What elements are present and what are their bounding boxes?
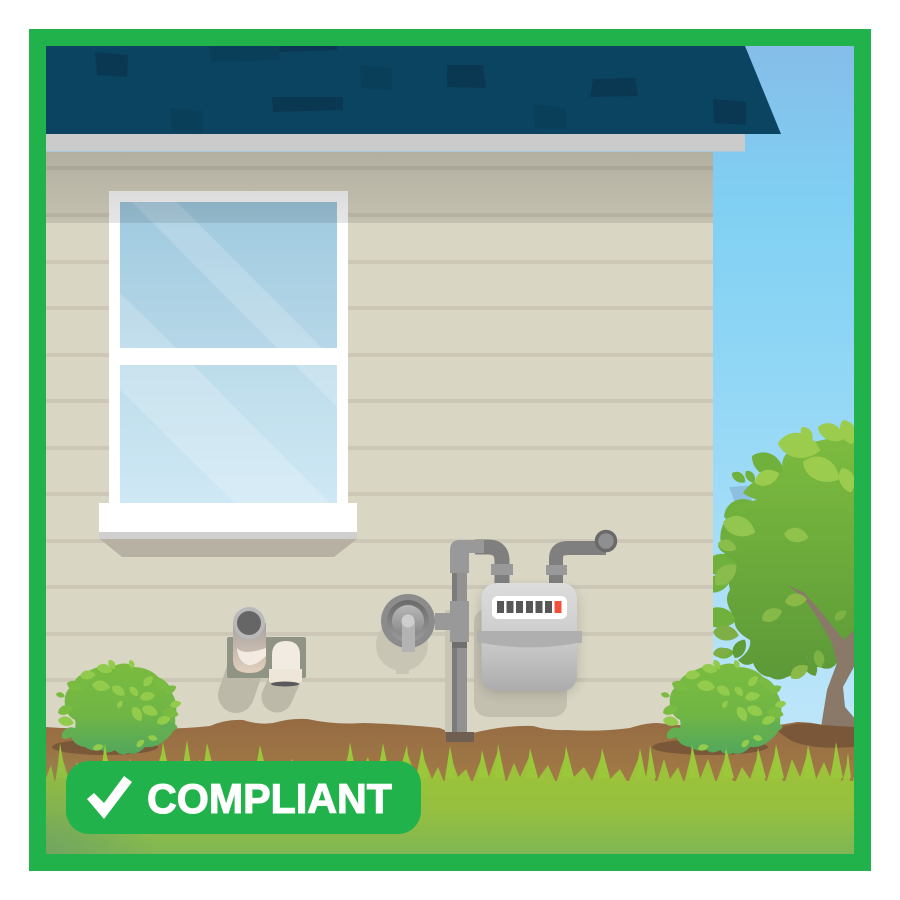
window sill [99, 503, 357, 532]
upper tee fitting [450, 540, 484, 573]
exhaust vents [227, 607, 306, 697]
pipe outlet knob [596, 532, 616, 550]
red meter digit [554, 601, 562, 613]
tree shadow patches [722, 486, 752, 526]
eave shadow [46, 152, 713, 223]
roof shingles [95, 46, 746, 125]
gas meter [477, 583, 582, 693]
lower window pane [120, 365, 337, 503]
riser base plate [446, 732, 474, 742]
badge corner shade [46, 744, 156, 854]
right bush ground shadow [652, 739, 768, 755]
regulator lever [402, 621, 415, 652]
right bush [660, 658, 787, 754]
grass lower fill [46, 781, 854, 854]
checkmark icon [87, 776, 132, 819]
outer dark leaves [713, 452, 818, 676]
outlet elbow [556, 548, 606, 585]
tree trunk [787, 585, 856, 730]
upper window pane [120, 202, 337, 348]
fascia board [46, 134, 745, 152]
regulator tee [435, 601, 469, 642]
vent mounting plate [227, 637, 306, 678]
sky [46, 46, 854, 725]
tree ground shadow [775, 723, 854, 748]
siding lines [46, 166, 713, 682]
thin tall grass blades [57, 740, 851, 778]
tree [713, 420, 854, 727]
meter band [477, 631, 582, 648]
faint roof shingles [278, 52, 279, 53]
window [99, 191, 357, 557]
sill underside [99, 532, 357, 539]
soil [46, 718, 854, 781]
inlet elbow [475, 547, 502, 585]
sill shadow [100, 539, 357, 557]
vent shadows [236, 655, 288, 697]
roof [46, 46, 781, 134]
pipe and regulator shadows [376, 610, 455, 732]
main riser [457, 573, 467, 732]
gas regulator [381, 594, 435, 652]
badge label: COMPLIANT [147, 775, 392, 822]
tree crown [713, 420, 854, 727]
gas piping [435, 532, 616, 742]
round vent pipe [233, 607, 266, 673]
light tree leaves [710, 417, 860, 682]
meter display [492, 596, 567, 619]
window frame [109, 191, 348, 506]
meter body [482, 583, 577, 691]
left bush [55, 658, 182, 754]
gas meter shadow [474, 608, 567, 717]
compliant badge [66, 761, 421, 834]
meter collars [491, 564, 513, 575]
left bush ground shadow [52, 739, 158, 755]
house wall [46, 152, 713, 742]
grass [46, 747, 854, 867]
elbow vent pipe [269, 641, 302, 686]
